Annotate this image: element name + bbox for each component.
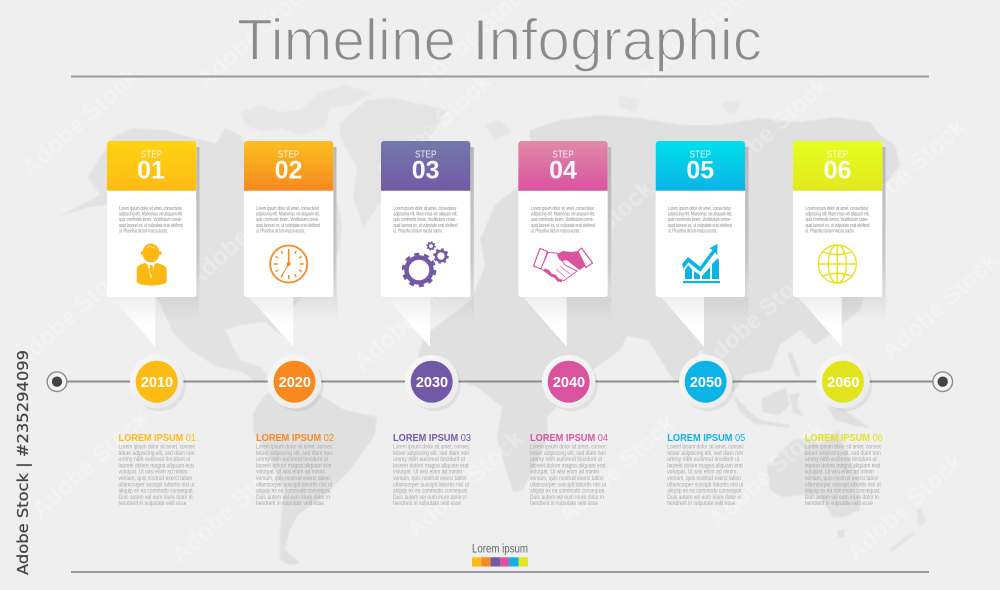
- new zealand: [917, 509, 927, 528]
- watermarks: Adobe Stock: [369, 68, 497, 187]
- text block 03: ummy nibh euismod tincidunt ut: [393, 456, 465, 463]
- card text: quis commodo lorem. Vestibulum conse-: [668, 217, 731, 223]
- text block 04: ummy nibh euismod tincidunt ut: [530, 456, 602, 463]
- long shadow: [293, 297, 337, 321]
- text block 04: volutpat. Ut wisi enim ad minim: [530, 469, 599, 476]
- card text: Lorem ipsum dolor sit amet, consectetur: [394, 206, 457, 212]
- text block 05: veniam, quis nostrud exerci tation: [667, 475, 741, 482]
- text block 04: hendrerit in vulputate velit esse: [530, 500, 598, 507]
- long shadow: [704, 297, 748, 321]
- bottom rule: [71, 571, 929, 573]
- text block 01: tetuer adipiscing elit, sed diam non: [118, 450, 195, 457]
- panel: step 05: 05: [686, 157, 714, 185]
- text block 05: ullamcorper suscipit lobortis nisl ut: [667, 481, 744, 488]
- text block 06: aliquip ex ea commodo consequat.: [805, 488, 881, 494]
- icon: gears: [404, 242, 448, 286]
- north america: [58, 128, 342, 383]
- text block 06: ummy nibh euismod tincidunt ut: [805, 456, 877, 463]
- panel: step 06: 06: [824, 157, 851, 185]
- philippines: [787, 352, 801, 377]
- text block 03: Lorem ipsum dolor sit amet, consec: [393, 444, 470, 451]
- panel: step 02: STEP: [278, 149, 299, 160]
- watermarks: Adobe Stock: [876, 247, 1000, 366]
- text block 05: LOREM IPSUM 05: [667, 432, 745, 444]
- pointer: [523, 297, 567, 347]
- text block 04: aliquip ex ea commodo consequat.: [530, 488, 606, 494]
- card text: [668, 206, 732, 234]
- text block 06: [805, 432, 883, 507]
- text block 04: tetuer adipiscing elit, sed diam non: [530, 450, 606, 457]
- arctic islands: [240, 85, 372, 135]
- text block 02: ullamcorper suscipit lobortis nisl ut: [256, 481, 332, 488]
- text block 03: laoreet dolore magna aliquam erat: [393, 462, 469, 470]
- text block 06: veniam, quis nostrud exerci tation: [805, 475, 879, 482]
- text block 02: [256, 432, 334, 507]
- south america: [253, 385, 377, 565]
- text block 06: laoreet dolore magna aliquam erat: [805, 462, 881, 470]
- watermarks: Adobe Stock: [693, 258, 821, 377]
- card text: [256, 206, 320, 234]
- card text: Lorem ipsum dolor sit amet, consectetur: [531, 206, 594, 212]
- timeline line: [65, 380, 935, 382]
- card text: Lorem ipsum dolor sit amet, consectetur: [668, 206, 731, 212]
- year marker 2020: [268, 355, 324, 411]
- year marker 2040: 2040: [553, 375, 585, 391]
- text block 02: LOREM IPSUM 02: [256, 432, 334, 444]
- text block 01: volutpat. Ut wisi enim ad minim: [118, 469, 188, 476]
- watermarks: Adobe Stock: [8, 255, 136, 374]
- card: [244, 141, 333, 297]
- text block 04: [530, 432, 608, 507]
- icon: businessman: [137, 244, 167, 286]
- text block 01: ummy nibh euismod tincidunt ut: [118, 456, 191, 463]
- text block 03: LOREM IPSUM 03: [393, 432, 471, 444]
- year marker 2020: 2020: [279, 375, 311, 391]
- panel: step 01: STEP: [141, 149, 162, 160]
- greenland: [340, 98, 447, 227]
- text block 03: hendrerit in vulputate velit esse: [393, 500, 461, 507]
- new guinea: [827, 407, 870, 428]
- panel: step 03: [381, 141, 474, 347]
- text block 02: Lorem ipsum dolor sit amet, consec: [256, 444, 332, 451]
- card text: quat laoreet ex, ut vulputate erat eleifend: [668, 223, 732, 229]
- text block 04: Lorem ipsum dolor sit amet, consec: [530, 444, 606, 451]
- text block 03: veniam, quis nostrud exerci tation: [393, 475, 467, 482]
- text block 05: Lorem ipsum dolor sit amet, consec: [667, 444, 744, 451]
- text block 03: [393, 432, 471, 507]
- icon: rising chart: [682, 243, 720, 283]
- text block 02: aliquip ex ea commodo consequat.: [256, 488, 332, 494]
- watermarks: Adobe Stock: [16, 63, 144, 182]
- card text: adipiscing elit. Maecenas vel aliquam elit,: [668, 212, 732, 218]
- indonesia: [732, 393, 790, 428]
- card text: quis commodo lorem. Vestibulum conse-: [394, 217, 457, 223]
- text block 05: ummy nibh euismod tincidunt ut: [667, 456, 740, 463]
- europe and africa: [418, 170, 630, 492]
- long shadow: [155, 297, 199, 321]
- text block 05: tetuer adipiscing elit, sed diam non: [667, 450, 744, 457]
- text block 05: Duis autem vel eum iriure dolor in: [667, 494, 742, 501]
- asia: [530, 115, 900, 393]
- panel: step 01: [107, 141, 200, 347]
- card text: ut. Phasellus dictum massa auctor,: [668, 228, 717, 234]
- card header: [244, 141, 333, 191]
- legend: Lorem ipsum: [472, 544, 528, 556]
- icon: globe: [818, 245, 856, 283]
- card text: ut. Phasellus dictum massa auctor,: [256, 228, 305, 234]
- card text: quat laoreet ex, ut vulputate erat eleifend: [394, 223, 458, 229]
- year marker 2050: [679, 355, 735, 411]
- card header: [107, 141, 196, 191]
- panel: step 05: STEP: [690, 149, 711, 160]
- text block 04: laoreet dolore magna aliquam erat: [530, 462, 606, 470]
- card header: [793, 141, 882, 191]
- card: [518, 141, 608, 297]
- text block 02: volutpat. Ut wisi enim ad minim: [256, 469, 325, 476]
- watermarks: Adobe Stock: [841, 448, 969, 567]
- card text: quat laoreet ex, ut vulputate erat eleifend: [119, 223, 183, 229]
- card text: quis commodo lorem. Vestibulum conse-: [531, 217, 594, 223]
- panel: step 04: STEP: [552, 149, 574, 160]
- text block 01: hendrerit in vulputate velit esse: [118, 500, 187, 507]
- world map: [58, 85, 927, 565]
- card: [793, 141, 882, 297]
- text block 06: tetuer adipiscing elit, sed diam non: [805, 450, 881, 457]
- card text: ut. Phasellus dictum massa auctor,: [531, 228, 580, 234]
- card text: ut. Phasellus dictum massa auctor,: [806, 228, 854, 234]
- text block 06: volutpat. Ut wisi enim ad minim: [805, 469, 874, 476]
- text block 02: veniam, quis nostrud exerci tation: [256, 475, 330, 482]
- year marker 2040: [542, 355, 598, 411]
- card text: adipiscing elit. Maecenas vel aliquam elit,: [531, 212, 595, 218]
- year marker 2060: 2060: [827, 375, 859, 391]
- long shadow: [567, 297, 611, 321]
- card text: ut. Phasellus dictum massa auctor,: [394, 228, 442, 234]
- panel: step 06: [793, 141, 886, 347]
- panel: step 02: 02: [275, 157, 302, 185]
- text block 01: aliquip ex ea commodo consequat.: [118, 488, 194, 494]
- watermarks: Adobe Stock: [401, 425, 529, 544]
- card text: Lorem ipsum dolor sit amet, consectetur: [119, 206, 182, 212]
- icon: clock: [270, 246, 307, 282]
- year marker 2050: 2050: [690, 375, 722, 391]
- watermarks: Adobe Stock: [553, 410, 681, 529]
- year marker 2010: [130, 355, 186, 411]
- card text: [531, 206, 595, 234]
- pointer: [386, 297, 430, 347]
- card text: adipiscing elit. Maecenas vel aliquam elit,: [806, 212, 870, 218]
- text block 04: Duis autem vel eum iriure dolor in: [530, 494, 604, 501]
- text block 06: Lorem ipsum dolor sit amet, consec: [805, 444, 881, 451]
- card text: [119, 206, 183, 234]
- watermarks: Adobe Stock: [706, 72, 834, 191]
- text block 01: laoreet dolore magna aliquam erat: [118, 462, 194, 470]
- text block 05: [667, 432, 745, 507]
- text block 02: hendrerit in vulputate velit esse: [256, 500, 324, 507]
- card: [107, 141, 196, 297]
- card text: Lorem ipsum dolor sit amet, consectetur: [806, 206, 869, 212]
- panel: step 01: 01: [137, 157, 165, 185]
- panel: step 06: STEP: [827, 149, 848, 160]
- iceland: [485, 120, 512, 140]
- watermarks: Adobe Stock: [166, 450, 294, 569]
- text block 05: laoreet dolore magna aliquam erat: [667, 462, 743, 470]
- card text: adipiscing elit. Maecenas vel aliquam elit,: [394, 212, 458, 218]
- icon: handshake: [534, 248, 592, 281]
- text block 04: ullamcorper suscipit lobortis nisl ut: [530, 481, 606, 488]
- long shadow: [430, 297, 474, 321]
- text block 03: Duis autem vel eum iriure dolor in: [393, 494, 467, 501]
- card: [381, 141, 470, 297]
- text block 02: laoreet dolore magna aliquam erat: [256, 462, 332, 470]
- watermarks: Adobe Stock: [181, 175, 309, 294]
- text block 06: ullamcorper suscipit lobortis nisl ut: [805, 481, 881, 488]
- stock id label: Adobe Stock | #235294099: [14, 350, 32, 575]
- panel: step 03: 03: [412, 157, 440, 185]
- text block 04: LOREM IPSUM 04: [530, 432, 608, 444]
- top rule: [71, 76, 929, 78]
- text block 01: [118, 432, 196, 507]
- text block 03: ullamcorper suscipit lobortis nisl ut: [393, 481, 469, 488]
- card text: [806, 206, 870, 234]
- watermarks: Adobe Stock: [26, 405, 154, 524]
- text block 06: hendrerit in vulputate velit esse: [805, 500, 873, 507]
- text block 05: volutpat. Ut wisi enim ad minim: [667, 469, 736, 476]
- text block 02: ummy nibh euismod tincidunt ut: [256, 456, 328, 463]
- card: [656, 141, 745, 297]
- text block 03: tetuer adipiscing elit, sed diam non: [393, 450, 469, 457]
- card text: quat laoreet ex, ut vulputate erat eleifend: [806, 223, 870, 229]
- title: Timeline Infographic: [237, 8, 762, 73]
- text block 01: veniam, quis nostrud exerci tation: [118, 475, 193, 482]
- timeline start marker: [47, 372, 67, 392]
- timeline end marker: [933, 372, 952, 392]
- panel: step 04: 04: [549, 157, 577, 185]
- card text: adipiscing elit. Maecenas vel aliquam elit,: [119, 212, 183, 218]
- text block 05: aliquip ex ea commodo consequat.: [667, 488, 743, 494]
- watermarks: Adobe Stock: [348, 258, 476, 377]
- card text: quis commodo lorem. Vestibulum catse-: [806, 217, 869, 223]
- card header: [381, 141, 470, 191]
- card text: adipiscing elit. Maecenas vel aliquam elit,: [256, 212, 320, 218]
- long shadow: [842, 297, 886, 321]
- text block 01: Lorem ipsum dolor sit amet, consec: [118, 444, 195, 451]
- watermarks: Adobe Stock: [531, 175, 659, 294]
- panel: step 02: [244, 141, 337, 347]
- text block 03: aliquip ex ea commodo consequat.: [393, 488, 469, 494]
- year marker 2010: 2010: [141, 375, 173, 391]
- card text: quat laoreet ex, ut vulputate erat eleifend: [256, 223, 320, 229]
- card text: quis commodo lorem. Vestibulum conse-: [119, 217, 182, 223]
- card text: Lorem ipsum dolor sit amet, consectetur: [256, 206, 319, 212]
- text block 06: LOREM IPSUM 06: [805, 432, 883, 444]
- card text: ut. Phasellus dictum massa auctor,: [119, 228, 168, 234]
- text block 04: veniam, quis nostrud exerci tation: [530, 475, 604, 482]
- australia: [767, 430, 860, 517]
- panel: step 04: [518, 141, 611, 347]
- northern islands: [618, 95, 640, 112]
- year marker 2030: 2030: [416, 375, 448, 391]
- watermarks: Adobe Stock: [843, 113, 971, 232]
- card header: [656, 141, 745, 191]
- text block 01: LOREM IPSUM 01: [118, 432, 196, 444]
- text block 05: hendrerit in vulputate velit esse: [667, 500, 736, 507]
- pointer: [249, 297, 293, 347]
- text block 02: tetuer adipiscing elit, sed diam non: [256, 450, 332, 457]
- tasmania: [837, 530, 845, 537]
- card text: [394, 206, 458, 234]
- text block 03: volutpat. Ut wisi enim ad minim: [393, 469, 462, 476]
- year marker 2060: [816, 355, 872, 411]
- borneo: [762, 388, 790, 415]
- text block 02: Duis autem vel eum iriure dolor in: [256, 494, 330, 501]
- card text: quat laoreet ex, ut vulputate erat eleifend: [531, 223, 595, 229]
- pointer: [798, 297, 842, 347]
- card header: [518, 141, 608, 191]
- legend: [472, 544, 528, 566]
- watermarks: Adobe Stock: [703, 415, 831, 534]
- pointer: [661, 297, 704, 347]
- text block 06: Duis autem vel eum iriure dolor in: [805, 494, 879, 501]
- text block 01: Duis autem vel eum iriure dolor in: [118, 494, 193, 501]
- panel: step 03: STEP: [415, 149, 437, 160]
- text block 01: ullamcorper suscipit lobortis nisl ut: [118, 481, 195, 488]
- card text: quis commodo lorem. Vestibulum conse-: [256, 217, 319, 223]
- year marker 2030: [405, 355, 461, 411]
- panel: step 05: [656, 141, 748, 347]
- pointer: [112, 297, 155, 347]
